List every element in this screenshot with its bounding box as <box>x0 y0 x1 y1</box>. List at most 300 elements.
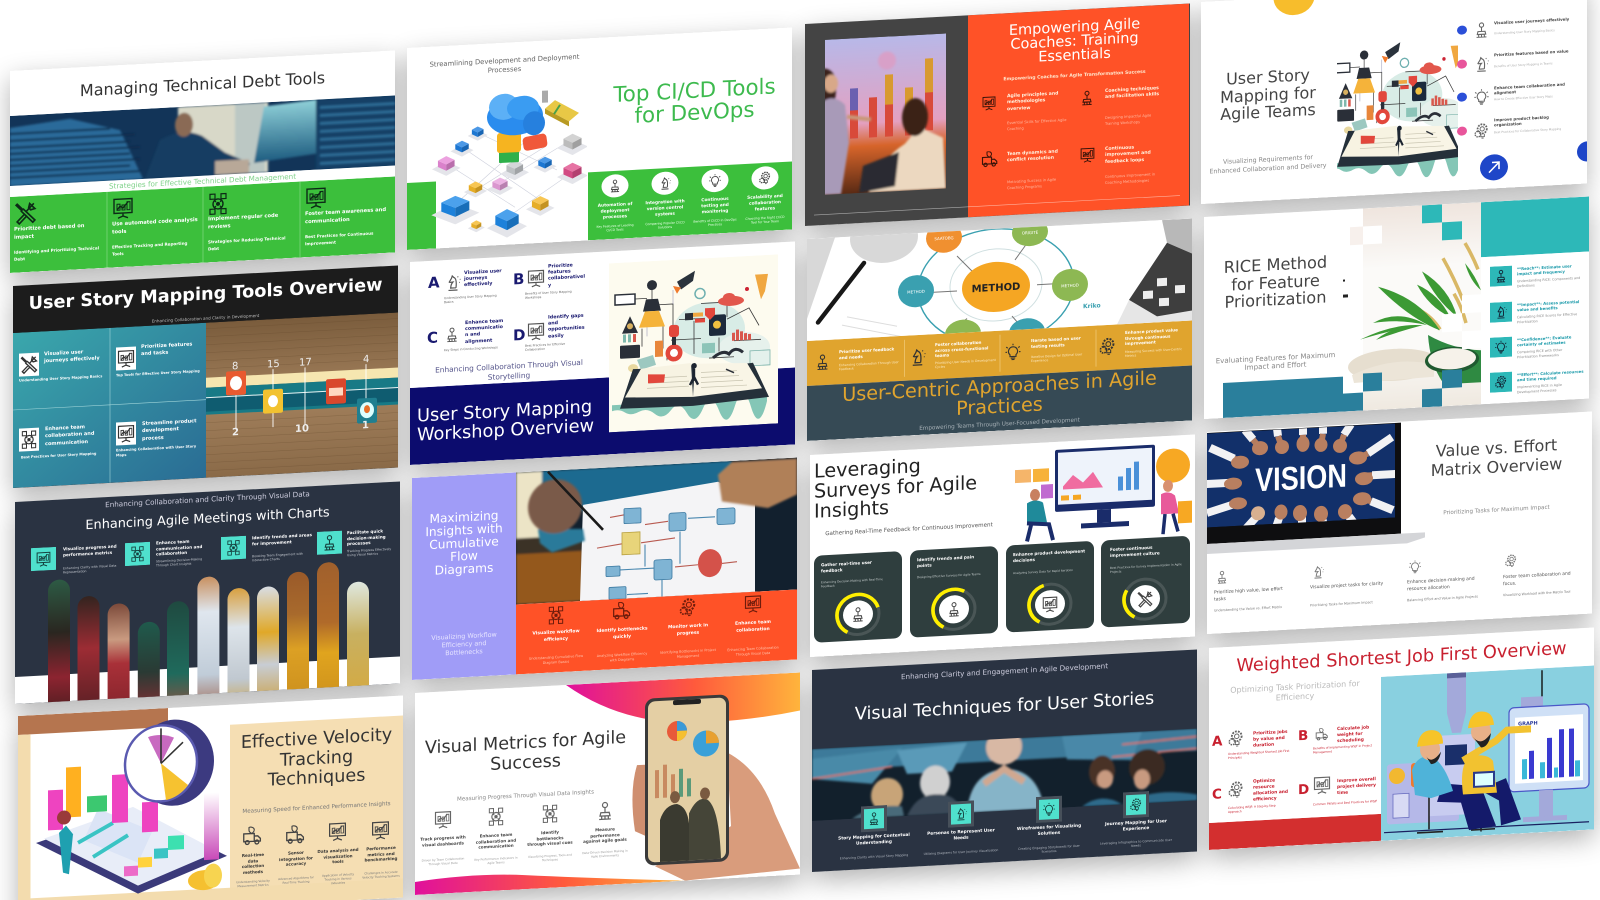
subtitle: Prioritizing Tasks for Maximum Impact <box>1443 505 1550 516</box>
item D: Improve overall project delivery time <box>1337 777 1376 796</box>
subtitle: Bottlenecks <box>445 647 483 657</box>
title: Matrix Overview <box>1431 454 1562 480</box>
subtitle: Measuring Progress Through Visual Data Insights <box>457 789 594 803</box>
item: agile principles <box>982 91 1066 131</box>
title: Enhancing Agile Meetings with Charts <box>85 505 330 533</box>
item: enhance team: Best Practices for User Story Mapping <box>21 452 96 460</box>
item: prioritize features: Prioritize features and tasks <box>141 341 192 357</box>
subtitle: Storytelling <box>488 370 530 381</box>
item: prioritize debt: Identifying and Prioritizing Technical Debt <box>14 245 99 261</box>
slide: Weighted Shortest Job First <box>1209 627 1594 850</box>
item: work in progress <box>658 595 718 664</box>
item: confidence: **Confidence**: Evaluate certainty of estimates <box>1517 334 1571 348</box>
title: Leveraging <box>814 454 921 483</box>
subtitle: Enhancing Clarity and Engagement in Agile Development <box>901 661 1108 681</box>
item: performance: Performance metrics and benchmarking <box>364 845 397 863</box>
item 4: Best Practices for Collaborative Story Mapping <box>1494 127 1561 134</box>
isometric cloud network illustration <box>432 90 587 238</box>
item: real time <box>232 823 274 900</box>
title: Success <box>490 751 561 775</box>
subtitle: Enhancing Collaboration and Clarity Through Visual Data <box>105 489 310 509</box>
item: project tasks: Visualize project tasks for clarity <box>1310 582 1383 591</box>
method diagram on desk: ORIGITE <box>1022 230 1039 236</box>
title: Workshop Overview <box>417 415 594 445</box>
item 1 <box>1457 16 1570 38</box>
yellow and slate bands <box>807 320 1192 441</box>
timeline labels: 4 <box>363 354 369 365</box>
subtitle: Optimizing Task Prioritization for <box>1230 679 1360 695</box>
title: Insights with <box>425 521 503 539</box>
slide: RICE Method <box>1204 196 1589 419</box>
card: trends: Identify trends and pain points <box>917 554 974 568</box>
item: integration: Comparing Popular CI/CD Solutions <box>645 220 685 230</box>
slide: Cumulative Flow Diagrams <box>412 457 797 680</box>
item: continuous improvement <box>1080 145 1155 185</box>
item: bottlenecks: Analyzing Workflow Efficiency with Diagrams <box>597 651 647 662</box>
item: effort <box>1490 367 1586 402</box>
subtitle: Efficiency and <box>442 639 486 649</box>
item: continuous improvement: Continuous Improvement in Coaching Methodologies <box>1105 172 1155 185</box>
item: visualize progress <box>29 542 121 579</box>
item: personas: Utilizing Diagrams for User Journey Visualization <box>924 848 998 856</box>
item: coaching techniques: Coaching techniques and facilitation skills <box>1105 86 1159 100</box>
subtitle: Impact and Effort <box>1245 360 1306 372</box>
item D: D <box>1298 782 1309 798</box>
subtitle <box>1209 678 1381 706</box>
title: Essentials <box>1038 46 1111 66</box>
item: automated analysis: Use automated code analysis tools <box>112 217 198 236</box>
title: for DevOps <box>634 97 755 128</box>
subtitle: Enhancing Collaboration and Clarity in Development <box>152 313 259 324</box>
VISION text: VISION <box>1255 457 1347 498</box>
item C: Enhance team communicatio <box>465 319 503 332</box>
red block <box>1209 814 1381 850</box>
item: bottlenecks: Identify bottlenecks through visual cues <box>527 829 573 847</box>
item: performance <box>360 817 402 895</box>
item: personas: Personas to Represent User Needs <box>927 828 995 842</box>
item: code reviews: Implement regular code reviews <box>208 213 278 231</box>
item: workflow efficiency: Visualize workflow efficiency <box>532 629 580 642</box>
green band <box>10 176 395 273</box>
item: prioritize features: Top Tools for Effective User Story Mapping <box>116 369 200 378</box>
title <box>807 366 1192 426</box>
item: enhance team: Enhance team collaboration and communication <box>45 424 94 447</box>
item: visualize progress: Enhancing Clarity with Visual Data Representation <box>63 564 116 575</box>
item: real time: data <box>248 858 258 863</box>
item: automated analysis <box>112 198 198 256</box>
title: Mapping for <box>1220 82 1316 106</box>
slide: User-Centric Approaches in Agile Practices <box>807 218 1192 441</box>
item: confidence <box>1490 332 1586 363</box>
subtitle: Empowering Coaches for Agile Transformation Success <box>1003 70 1146 82</box>
item: performance: Challenges in Accurate Velocity Tracking Systems <box>362 870 400 880</box>
item: team collaboration: Key Performance Indicators in Agile Teams <box>474 856 518 865</box>
item 4: Improve product backlog organization <box>1494 114 1549 127</box>
item: team collaboration <box>723 591 783 660</box>
item: enhance team <box>19 424 96 460</box>
item: impact: **Impact**: Assess potential value and benefits <box>1517 299 1579 313</box>
item: facilitate decisions: Facilitate quick decision-making processes <box>347 528 386 547</box>
slide: User Story Mapping Tools Overview <box>13 265 398 488</box>
item: team collaboration: Enhancing Team Collaboration Through Visual Data <box>727 645 779 657</box>
subtitle <box>1204 350 1347 374</box>
item: real time: Real-time <box>242 852 264 858</box>
item: data analysis: Application of Velocity Tracking in Various Industries <box>322 872 354 885</box>
title <box>412 508 516 579</box>
list: four agile items <box>1457 16 1570 139</box>
item A <box>422 265 507 311</box>
title: Weighted Shortest Job First Overview <box>1236 638 1567 677</box>
item: bottlenecks: Identify bottlenecks quickly <box>596 626 648 640</box>
item: streamline: Streamline product development process <box>142 418 197 442</box>
item: agile principles: Essential Skills for Effective Agile Coaching <box>1007 118 1066 131</box>
item: prioritize debt <box>14 202 99 261</box>
card: trends <box>910 546 998 638</box>
title: for Feature <box>1231 270 1320 294</box>
item: work in progress: Identifying Bottlenecks in Project Management <box>660 648 716 659</box>
item B <box>510 258 595 305</box>
item: decision making: Enhance decision-making and resource allocation <box>1407 577 1475 592</box>
card: product decisions <box>1006 541 1094 633</box>
item: data analysis: Data analysis and visualization tools <box>317 847 359 865</box>
timeline over wood image <box>206 312 398 478</box>
gauge <box>1027 580 1073 628</box>
subtitle <box>412 630 516 659</box>
subtitle: Efficiency <box>1276 691 1314 702</box>
green blocks <box>407 162 792 250</box>
item: product value <box>1096 320 1192 371</box>
item 3: Enhance team collaboration and alignment <box>1494 82 1565 95</box>
item: sensor <box>275 821 317 899</box>
item 2 <box>1457 48 1568 72</box>
subtitle <box>410 356 608 386</box>
method diagram on desk: METHOD <box>907 289 925 295</box>
title <box>230 725 403 794</box>
title: Visual Metrics for Agile <box>425 728 626 758</box>
photo: presenter and chart <box>825 34 946 195</box>
item: team awareness: Best Practices for Continuous Improvement <box>305 231 373 246</box>
item: bottlenecks <box>592 598 652 667</box>
item: foster collaboration: Foster collaboration across cross-functional teams <box>935 340 988 358</box>
subtitle: Streamlining Development and Deployment <box>430 53 579 69</box>
item: confidence: Comparing RICE with Other Prioritization Frameworks <box>1517 348 1562 359</box>
item: journey: Journey Mapping for User Experience <box>1105 819 1167 833</box>
item: visualize journeys: Understanding User Story Mapping Basics <box>19 374 102 383</box>
illustration: book of ideas <box>1337 42 1458 178</box>
title <box>613 74 776 128</box>
item: project tasks <box>1308 558 1396 613</box>
item: reach: **Reach**: Estimate user impact and frequency <box>1517 263 1572 277</box>
item 2: Benefits of User Story Mapping in Teams <box>1494 61 1553 68</box>
laptop screen with raised fists <box>1207 420 1427 556</box>
item 3 <box>1457 82 1565 105</box>
timeline labels <box>232 354 369 438</box>
subtitle: Gathering Real-Time Feedback for Continuous Improvement <box>825 522 993 537</box>
item: journey <box>1090 788 1182 855</box>
item: dashboards <box>420 806 466 879</box>
plant image and colored squares <box>1204 196 1589 419</box>
item A: Understanding User Story Mapping Basics <box>444 293 497 304</box>
item B: y <box>548 283 551 288</box>
item: performance <box>582 798 628 870</box>
card: improvement culture: Foster continuous improvement culture <box>1110 545 1160 558</box>
title: RICE Method <box>1224 252 1327 277</box>
timeline labels: 8 <box>232 361 238 372</box>
item: iterate: Iterative Design for Optimal User Experience <box>1031 352 1082 364</box>
item: automation: Automation of deployment processes <box>598 202 632 221</box>
arch photo strips <box>15 481 400 704</box>
slide: Managing Technical Debt Tools <box>10 50 395 273</box>
title: Techniques <box>268 766 365 791</box>
card: improvement culture <box>1101 536 1190 627</box>
navy blocks <box>410 368 795 465</box>
subtitle: Evaluating Features for Maximum <box>1216 350 1335 365</box>
slide: Visual Metrics for Agile Success <box>415 672 800 895</box>
item: visualize journeys <box>19 349 102 383</box>
timeline labels: 15 <box>267 359 280 370</box>
item: testing: Benefits of CI/CD in DevOps Practices <box>693 217 737 227</box>
illustration: engineers reading a chart: GRAPH <box>1518 720 1538 728</box>
subtitle: Strategies for Effective Technical Debt Management <box>109 172 296 191</box>
item: team dynamics <box>982 149 1058 190</box>
item: testing: Continuous testing and monitoring <box>701 197 729 215</box>
item: work in progress: Monitor work in progress <box>668 623 708 636</box>
item A: Understanding Weighted Shortest Job First Principles <box>1228 749 1289 760</box>
item: team focus <box>1501 548 1589 602</box>
item: reach: Understanding RICE: Components and Definitions <box>1517 276 1580 288</box>
item D <box>510 310 595 357</box>
item: scalability: Scalability and collaboration features <box>747 194 783 212</box>
item: code reviews <box>208 192 286 251</box>
decorative circles <box>1274 0 1587 162</box>
title <box>814 453 977 522</box>
gauge <box>835 590 881 639</box>
item A <box>1211 723 1295 766</box>
item: team focus: Visualizing Workload with the Matrix Tool <box>1503 590 1570 597</box>
photo: team with holographic screens <box>812 728 1197 821</box>
title: Maximizing <box>429 508 499 526</box>
item: decision making: Balancing Effort and Value in Agile Projects <box>1407 595 1478 602</box>
item B: B <box>1298 728 1308 744</box>
title: Coaches: Training <box>1010 30 1139 53</box>
item: dashboards: Track progress with visual dashboards <box>420 834 466 847</box>
item C: C <box>427 329 438 347</box>
card: trends: Designing Effective Surveys for Agile Teams <box>917 572 981 579</box>
item: journey: Leveraging Infographics to Communicate User Needs <box>1100 838 1172 848</box>
item: story mapping <box>828 802 920 869</box>
item: real time: collection <box>242 863 264 870</box>
title: Diagrams <box>435 560 493 577</box>
item: continuous improvement: Continuous improvement and feedback loops <box>1105 145 1151 165</box>
item C: Optimize resource allocation and efficiency <box>1253 778 1288 803</box>
item: effort: **Effort**: Calculate resources and time required <box>1517 369 1584 383</box>
item: enhance team: Enhance team communication and collaboration <box>156 539 202 557</box>
item: dashboards: Driven by Team Collaboration Through Visual Data <box>422 856 464 866</box>
item D: Best Practices for Effective Collaboration <box>525 342 565 352</box>
subtitle: Processes <box>488 64 521 74</box>
subtitle: Visualizing Workflow <box>431 630 497 642</box>
item: bottlenecks: Visualizing Progress, Tools and Techniques <box>528 853 572 862</box>
item: prioritize features <box>116 341 200 378</box>
timeline labels: 2 <box>232 427 239 438</box>
item: bottlenecks <box>527 801 573 873</box>
illustration: book of ideas <box>609 254 778 432</box>
icon: blue arrow button <box>1480 154 1508 180</box>
item: decision making <box>1405 553 1493 607</box>
item: testing <box>693 169 737 227</box>
title: Tracking <box>280 747 353 771</box>
item: coaching techniques: Designing Impactful Agile Training Workshops <box>1105 114 1151 126</box>
item: team focus: Foster team collaboration and focus. <box>1503 572 1571 587</box>
item C: C <box>1212 786 1222 803</box>
title <box>1220 65 1316 124</box>
item 1: Understanding User Story Mapping Basics <box>1494 28 1555 35</box>
item: streamline <box>116 418 197 458</box>
item: integration <box>645 172 685 230</box>
title: Flow <box>450 548 478 564</box>
item: iterate <box>1000 326 1096 376</box>
isometric clock and bars illustration <box>18 695 403 900</box>
title: User Story <box>1226 65 1310 89</box>
item: real time: Understanding Velocity Measurement Metrics <box>236 879 270 888</box>
title: Surveys for Agile <box>814 471 977 503</box>
item B: B <box>513 270 524 289</box>
illustration: team around dashboard <box>1013 434 1195 544</box>
item C <box>1211 771 1295 816</box>
item: impact: Calculating RICE Scores for Effective Prioritization <box>1517 312 1577 324</box>
slide: Value vs. Effort Matrix <box>1207 411 1592 634</box>
item: identify trends: Identify trends and areas for improvement <box>252 532 312 546</box>
timeline labels: 1 <box>362 420 369 431</box>
subtitle: Enhancing Collaboration Through Visual <box>435 358 583 375</box>
title <box>1401 434 1592 482</box>
subtitle: Empowering Teams Through User-Focused Development <box>919 417 1080 432</box>
method diagram on desk: METHOD <box>1061 283 1079 288</box>
item: team collaboration: Enhance team collaboration and communication <box>476 832 516 850</box>
timeline labels: 17 <box>299 357 312 369</box>
item: wireframes: Wireframes for Visualizing Solutions <box>1017 824 1081 837</box>
item: automation: Key Features of Leading CI/CD Tools <box>596 223 634 233</box>
lavender panel, photo and orange band <box>412 457 797 680</box>
item: identify trends: Boosting Team Engagement with Interactive Charts <box>252 552 303 563</box>
item: integration: Integration with version control systems <box>645 199 685 218</box>
item: foster collaboration <box>904 331 1000 381</box>
subtitle <box>1209 154 1327 176</box>
item: identify trends <box>219 531 311 568</box>
title: Cumulative <box>429 534 499 552</box>
item: sensor: Sensor integration for accuracy <box>279 850 313 867</box>
item C: Key Steps in Conducting Workshops <box>444 345 498 352</box>
item: team awareness: Foster team awareness and communication <box>305 207 386 225</box>
item: scalability <box>745 166 785 225</box>
item: sensor: Advanced Algorithms for Real-Time Tracking <box>278 875 314 885</box>
title: Agile Teams <box>1220 100 1316 124</box>
item: team awareness <box>305 188 386 246</box>
item B: Prioritize features collaborativel <box>548 263 585 282</box>
item: prioritize feedback: Enhancing Collaboration Through User Feedback <box>839 360 899 372</box>
item: prioritize feedback <box>807 336 904 386</box>
slide: Empowering Agile Coaches <box>805 3 1190 226</box>
card: gather feedback: Enhancing Decision-Making with Real-Time Feedback <box>821 577 883 588</box>
item: performance: Measure performance against agile goals <box>583 826 627 844</box>
gauge <box>1122 575 1168 623</box>
item: visualize journeys: Visualize user journeys effectively <box>44 349 100 365</box>
item D: Identify gaps and opportunities easily <box>548 314 585 339</box>
item: workflow efficiency: Understanding Cumulative Flow Diagram Basics <box>529 654 583 665</box>
item B: Calculate job weight for scheduling <box>1337 725 1369 744</box>
item 4 <box>1457 114 1561 139</box>
title: User-Centric Approaches in Agile <box>842 366 1157 406</box>
item: scalability: Choosing the Right CI/CD Tool for Your Team <box>745 215 785 225</box>
item: enhance team: Streamlining Decision-Making Through Chart Insights <box>156 557 202 568</box>
item D: Common Pitfalls and Best Practices for WSJF <box>1313 799 1377 806</box>
item: workflow efficiency <box>526 602 586 671</box>
item: automated analysis: Effective Tracking and Reporting Tools <box>112 241 187 256</box>
slide: Top CI/CD Tools <box>407 27 792 250</box>
slide: Effective Velocity Tracking <box>18 695 403 900</box>
item: performance: Data-Driven Decision Making in Agile Environments <box>582 849 628 859</box>
title: Prioritization <box>1225 287 1326 312</box>
method diagram on desk: Kriko <box>1083 302 1101 310</box>
timeline labels: 10 <box>295 423 309 435</box>
item: code reviews: Strategies for Reducing Technical Debt <box>208 235 286 251</box>
title: Empowering Agile <box>1009 16 1140 39</box>
item: team collaboration: Enhance team collaboration <box>735 620 771 633</box>
item D: D <box>513 326 525 345</box>
item: wireframes: Creating Engaging Storyboards for User Scenarios <box>1018 844 1080 854</box>
title: Practices <box>956 392 1043 420</box>
item: agile principles: Agile principles and methodologies overview <box>1007 91 1058 112</box>
subtitle: Enhanced Collaboration and Delivery <box>1209 162 1327 176</box>
item: team dynamics: Motivating Success in Agile Coaching Programs <box>1007 178 1056 190</box>
subtitle: Measuring Speed for Enhanced Performance Insights <box>242 801 391 815</box>
item A: A <box>428 273 440 292</box>
item B: Benefits of User Story Mapping Workshops <box>525 289 572 300</box>
item B <box>1297 719 1381 761</box>
item: prioritize debt: Prioritize debt based on impact <box>14 223 84 241</box>
card: gather feedback: Gather real-time user feedback <box>821 560 872 574</box>
item: project tasks: Prioritizing Tasks for Maximum Impact <box>1310 600 1373 608</box>
item: facilitate decisions <box>315 526 400 563</box>
item C <box>422 315 507 361</box>
item 3: How to Create Effective User Story Maps <box>1494 94 1553 101</box>
item: effort: Implementing RICE in Agile Development Processes <box>1517 383 1562 394</box>
title: User Story Mapping <box>417 396 592 427</box>
item: iterate: Iterate based on user testing results <box>1031 335 1081 349</box>
card: gather feedback <box>814 551 902 643</box>
method diagram on desk <box>807 218 1192 341</box>
title: User Story Mapping Tools Overview <box>29 275 382 314</box>
item: prioritize feedback: Prioritize user feedback and needs <box>839 346 894 360</box>
item: high value <box>1212 563 1300 618</box>
title <box>1204 252 1347 312</box>
teal panel <box>13 322 206 488</box>
title: Insights <box>814 496 889 523</box>
gauge <box>931 585 977 634</box>
item: story mapping: Story Mapping for Contextual Understanding <box>838 833 910 847</box>
slide: Leveraging Surveys <box>810 434 1195 657</box>
item: team dynamics: Team dynamics and conflict resolution <box>1007 150 1058 164</box>
title <box>415 728 636 779</box>
item: product value: Enhance product value through continuous improvement <box>1125 327 1178 346</box>
photo: developer among paper stacks <box>10 96 395 186</box>
method diagram on desk: SAATOBG <box>934 235 954 241</box>
gradient sweeps, phone and hand <box>415 672 800 895</box>
subtitle: Visualizing Requirements for <box>1223 154 1313 166</box>
item 2: Prioritize features based on value <box>1494 48 1568 57</box>
item: visualize progress: Visualize progress and performance metrics <box>63 544 117 557</box>
item: personas <box>915 798 1007 865</box>
